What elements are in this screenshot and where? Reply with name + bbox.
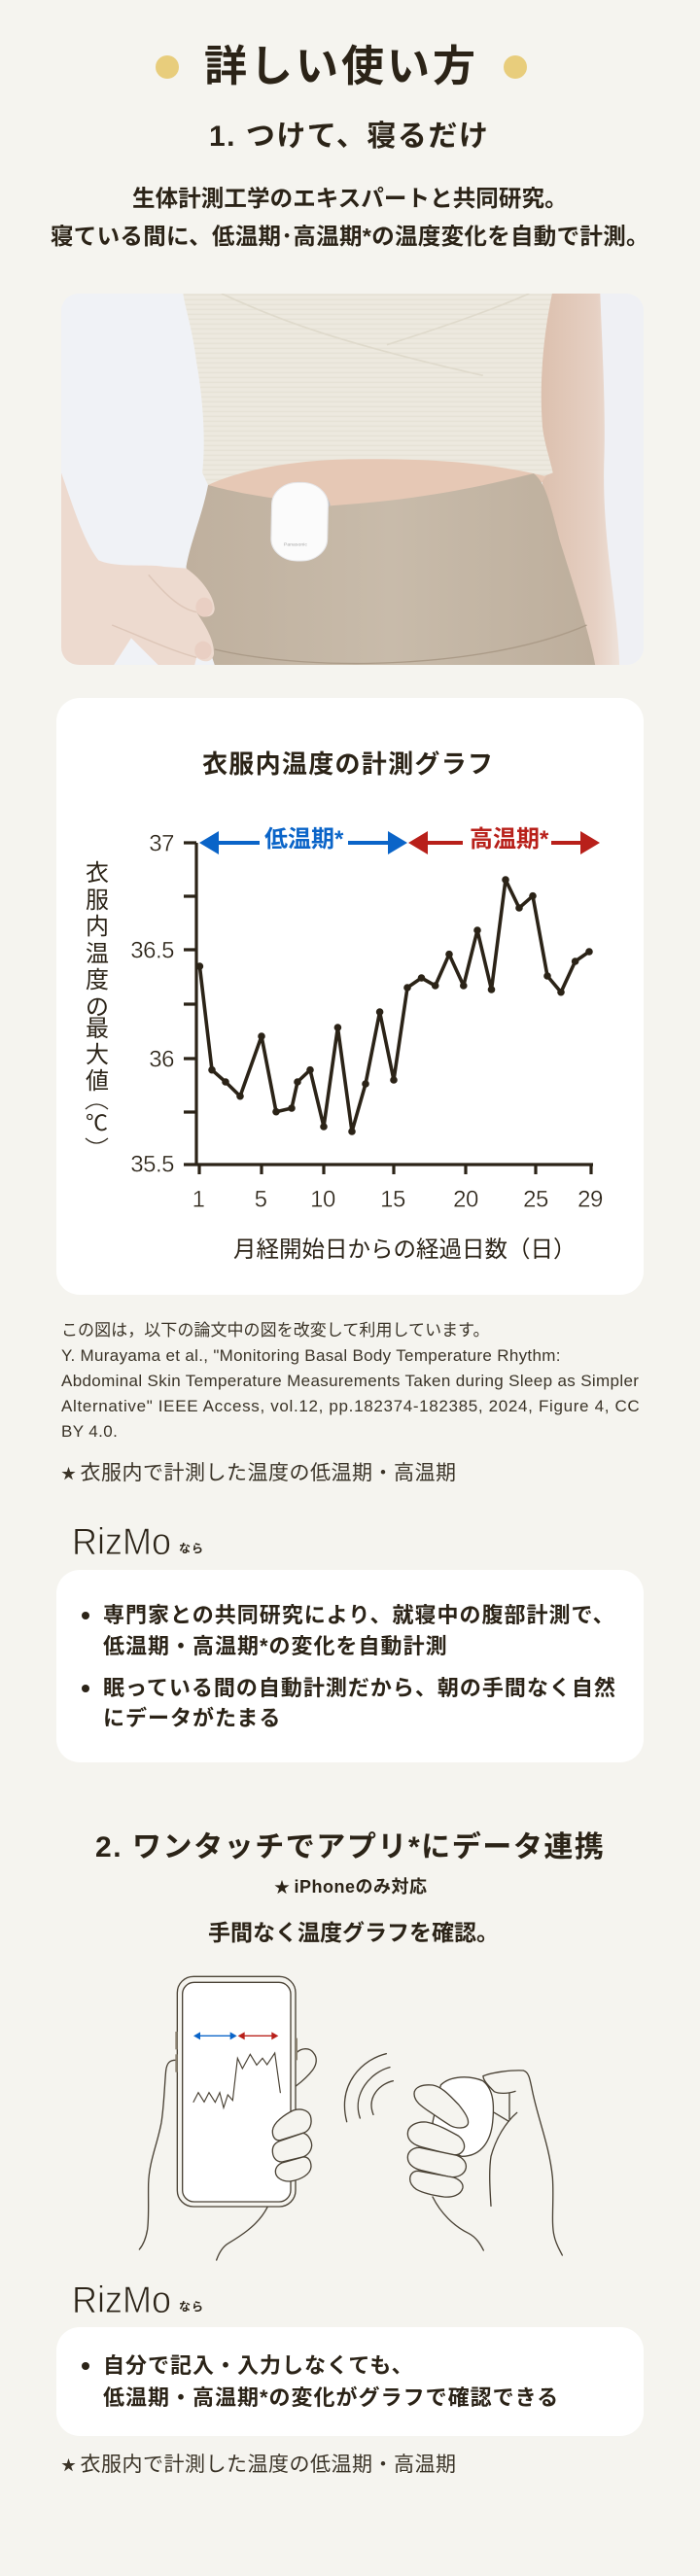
panel: RizMo benefits 1 <box>56 1570 644 1762</box>
icon: device held in hand <box>433 2077 493 2156</box>
x axis title: 月経開始日からの経過日数（日） <box>233 1236 576 1262</box>
benefit text 2 line 2: にデータがたまる <box>103 1706 281 1730</box>
x axis tick labels: 29 <box>578 1186 603 1213</box>
text block: citation note: この図は，以下の論文中の図を改変して利用しています。 <box>61 1321 490 1340</box>
text block: citation note: Abdominal Skin Temperature Measurements Taken during Sleep as Simpler <box>61 1372 639 1390</box>
holding fingers <box>272 2109 312 2181</box>
left hand outline <box>139 2049 316 2260</box>
arrow: high temperature phase: 高温期* <box>470 826 549 853</box>
phone screen graph <box>193 2053 280 2107</box>
x axis tick labels: 25 <box>523 1186 548 1213</box>
benefit text 1 line 2: 低温期・高温期*の変化を自動計測 <box>103 1634 448 1658</box>
photo: device worn on waistband <box>61 294 644 665</box>
right hand outline <box>407 2071 562 2255</box>
footnote: definition of phases: ★衣服内で計測した温度の低温期・高温期 <box>61 2454 457 2476</box>
benefit text 1: 専門家との共同研究により、就寝中の腹部計測で、 <box>103 1603 615 1627</box>
benefit text line 2: 低温期・高温期*の変化がグラフで確認できる <box>103 2385 559 2410</box>
x axis tick labels: 5 <box>255 1186 267 1213</box>
x axis tick labels: 20 <box>453 1186 478 1213</box>
chart title: 衣服内温度の計測グラフ <box>202 749 494 779</box>
panel: temperature graph card <box>56 698 644 1295</box>
icon: phone <box>175 1976 298 2207</box>
x axis tick labels <box>192 1186 603 1213</box>
text block: step 2 description: 手間なく温度グラフを確認。 <box>208 1920 499 1945</box>
icon: bullet <box>82 2362 89 2370</box>
text block: citation note: Y. Murayama et al., "Monitoring Basal Body Temperature Rhythm: <box>61 1346 561 1365</box>
y axis tick labels: 36.5 <box>130 937 174 964</box>
x axis tick labels: 10 <box>310 1186 335 1213</box>
icon: bullet <box>82 1612 89 1619</box>
arrow: low temperature phase: 低温期* <box>264 826 344 853</box>
y axis unit: ℃ <box>86 1111 108 1135</box>
note: iPhone only: ★iPhoneのみ対応 <box>274 1877 428 1897</box>
illustration: phone and device touch <box>138 1975 563 2261</box>
y axis unit <box>86 1104 108 1143</box>
logo: RizMo: なら <box>179 2300 204 2314</box>
benefit text 2: 眠っている間の自動計測だから、朝の手間なく自然 <box>103 1676 616 1700</box>
text block: citation note <box>61 1321 640 1441</box>
heading: step 1: 1. つけて、寝るだけ <box>209 121 489 153</box>
heading: step 2: 2. ワンタッチでアプリ*にデータ連携 <box>95 1831 605 1863</box>
y axis tick labels: 35.5 <box>130 1151 174 1178</box>
icon: left yellow dot <box>156 55 179 79</box>
y axis tick labels: 37 <box>149 830 174 857</box>
heading text: 詳しい使い方 <box>204 43 478 90</box>
x axis tick labels: 1 <box>192 1186 205 1213</box>
text block: step 1 description: 生体計測工学のエキスパートと共同研究。 <box>132 186 568 211</box>
text block: citation note: BY 4.0. <box>61 1422 118 1441</box>
text block: step 1 description: 寝ている間に、低温期･高温期*の温度変化を自動で計測。 <box>51 224 649 249</box>
photo: device worn on waistband: Panasonic <box>284 542 308 547</box>
y axis title: 衣服内温度の最大値 <box>86 860 109 1095</box>
icon: phone screen arrows <box>193 2032 278 2039</box>
icon: bullet <box>82 1685 89 1692</box>
title: main heading with dots <box>156 43 527 90</box>
arrow: high temperature phase <box>408 826 600 854</box>
text block: step 1 description <box>51 186 649 249</box>
footnote: definition of phases: ★衣服内で計測した温度の低温期・高温期 <box>61 1462 457 1484</box>
icon: right yellow dot <box>504 55 527 79</box>
line chart: axes <box>184 843 593 1174</box>
y axis tick labels: 36 <box>149 1046 174 1073</box>
data line with markers <box>196 876 593 1135</box>
icon: signal waves <box>345 2054 393 2122</box>
panel: RizMo benefits 2 <box>56 2327 644 2436</box>
text block: citation note: Alternative" IEEE Access, vol.12, pp.182374-182385, 2024, Figure 4, CC <box>61 1397 640 1415</box>
logo: RizMo: なら <box>179 1542 204 1555</box>
arrow: low temperature phase <box>199 826 407 854</box>
benefit text: 自分で記入・入力しなくても、 <box>103 2353 414 2378</box>
y axis tick labels <box>130 830 174 1178</box>
x axis tick labels: 15 <box>380 1186 405 1213</box>
